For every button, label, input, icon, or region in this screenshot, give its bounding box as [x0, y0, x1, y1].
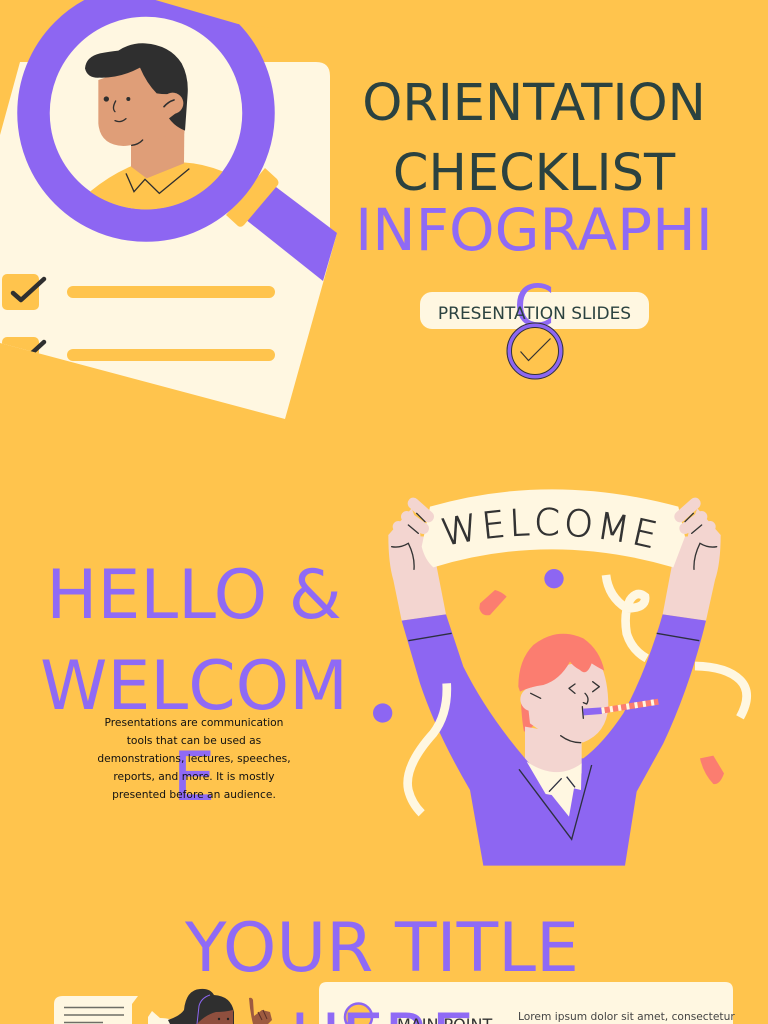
fists	[388, 508, 425, 567]
confetti	[479, 590, 507, 615]
magnifier top clip	[152, 0, 290, 30]
arms	[388, 535, 446, 621]
heading: hello and welcome: WELCOM	[40, 647, 348, 726]
title: orientation checklist: CHECKLIST	[393, 144, 675, 203]
illustration: welcome person	[373, 489, 752, 866]
magnifier lens	[34, 0, 258, 226]
intro paragraph: Presentations are communication	[105, 716, 283, 729]
streamer: right	[606, 575, 747, 717]
illustration: welcome person: WELCOME	[441, 507, 656, 548]
man portrait	[85, 43, 223, 210]
title: orientation checklist	[362, 74, 706, 203]
lorem text: Lorem ipsum dolor sit amet, consectetur	[518, 1010, 735, 1022]
intro paragraph: presented before an audience.	[112, 788, 276, 801]
streamer: left	[408, 683, 447, 813]
sweater	[402, 614, 706, 866]
intro paragraph: tools that can be used as	[127, 734, 261, 747]
neck and face	[525, 727, 582, 780]
note card	[54, 996, 138, 1024]
presenter figure	[148, 989, 272, 1024]
checkmark badge	[506, 322, 564, 380]
fingers	[398, 503, 710, 538]
banner	[422, 489, 685, 567]
intro paragraph: reports, and more. It is mostly	[113, 770, 275, 783]
intro paragraph	[97, 716, 291, 801]
subtitle pill	[420, 292, 649, 329]
heading: hello and welcome	[40, 556, 348, 817]
heading: infographic	[355, 196, 713, 340]
face details	[531, 682, 599, 743]
magnifier collar	[226, 168, 278, 227]
small badge	[345, 1004, 372, 1024]
paper sheet	[0, 62, 337, 419]
collar	[527, 762, 582, 817]
checklist rows	[2, 274, 275, 361]
heading: your title here	[185, 908, 579, 1024]
heading: hello and welcome: HELLO &	[46, 556, 342, 635]
heading: infographic: C	[514, 272, 554, 340]
magnifier handle	[245, 184, 337, 281]
heading: hello and welcome: E	[173, 738, 215, 817]
subtitle text: PRESENTATION SLIDES	[438, 304, 631, 324]
back hair	[521, 697, 540, 732]
title: orientation checklist: ORIENTATION	[362, 74, 706, 133]
intro paragraph: demonstrations, lectures, speeches,	[97, 752, 291, 765]
heading: infographic: INFOGRAPHI	[355, 196, 713, 264]
party blower	[583, 711, 602, 712]
banner word	[444, 535, 662, 551]
content panel	[319, 982, 733, 1024]
hair	[518, 634, 604, 692]
heading: your title here: YOUR TITLE	[185, 908, 579, 988]
confetti dots	[544, 569, 564, 588]
